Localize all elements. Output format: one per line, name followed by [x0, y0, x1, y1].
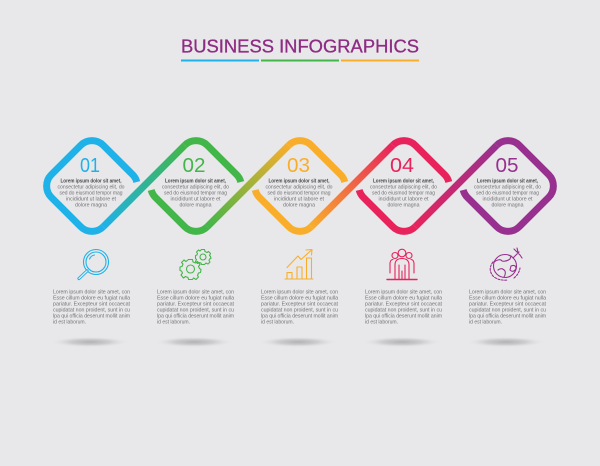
step 01 text: 01 [80, 155, 100, 177]
paragraph column 3: pariatur. Excepteur sint occaecat [261, 302, 339, 308]
icon: globe with plane [490, 248, 522, 280]
paragraph column 5: pariatur. Excepteur sint occaecat [469, 302, 547, 308]
paragraph column 2: pariatur. Excepteur sint occaecat [157, 302, 235, 308]
step 03 text: Lorem ipsum dolor sit amet, [268, 178, 330, 184]
step 03 text [266, 155, 333, 208]
step 02 text [162, 155, 229, 208]
step 02 text: 02 [182, 155, 206, 177]
paragraph column 5 [469, 290, 547, 326]
title: BUSINESS INFOGRAPHICS [181, 36, 419, 56]
step 01 text: Lorem ipsum dolor sit amet, [60, 178, 122, 184]
icon: growth chart [285, 250, 313, 279]
paragraph column 1: lpa qui officia deserunt mollit anim [53, 314, 130, 320]
step 04 text [370, 155, 437, 208]
icon: magnifying glass [79, 250, 108, 278]
ribbon: blue to green strand [47, 141, 241, 231]
ribbon: red to purple strand [359, 141, 553, 231]
step 01 text: dolore magna [75, 202, 107, 208]
step 01 text [58, 155, 125, 208]
paragraph column 5: Lorem ipsum dolor site amet, con [469, 290, 546, 296]
step 05 text: consectetur adipiscing elit, do [474, 184, 541, 190]
step 05 text: incididunt ut labore et [482, 196, 533, 202]
paragraph column 4: lpa qui officia deserunt mollit anim [365, 314, 442, 320]
paragraph column 1 [53, 290, 131, 326]
step 02 text: sed do eiusmod tempor mag [164, 190, 227, 196]
ribbon: green to orange strand [151, 141, 345, 231]
step 03 text: consectetur adipiscing elit, do [266, 184, 333, 190]
step 05 text [474, 155, 541, 208]
step 03 text: sed do eiusmod tempor mag [268, 190, 331, 196]
paragraph column 2 [157, 290, 235, 326]
paragraph column 2: id est laborum. [157, 320, 190, 326]
paragraph column 5: Esse cillum dolore eu fugiat nulla [469, 296, 546, 302]
paragraph column 1: cupidatat non proident, sunt in cu [53, 308, 130, 314]
drop shadows under columns [50, 336, 546, 348]
paragraph column 5: cupidatat non proident, sunt in cu [469, 308, 546, 314]
step 02 text: consectetur adipiscing elit, do [162, 184, 229, 190]
step 04 text: Lorem ipsum dolor sit amet, [373, 178, 435, 184]
paragraph column 4: Lorem ipsum dolor site amet, con [365, 290, 442, 296]
paragraph column 4: id est laborum. [365, 320, 398, 326]
paragraph column 3: Lorem ipsum dolor site amet, con [261, 290, 338, 296]
step 01 text: sed do eiusmod tempor mag [60, 190, 123, 196]
paragraph column 4: cupidatat non proident, sunt in cu [365, 308, 442, 314]
paragraph column 3: id est laborum. [261, 320, 294, 326]
paragraph column 3: Esse cillum dolore eu fugiat nulla [261, 296, 338, 302]
step 02 text: incididunt ut labore et [170, 196, 221, 202]
step 04 text: sed do eiusmod tempor mag [372, 190, 435, 196]
paragraph column 4: pariatur. Excepteur sint occaecat [365, 302, 443, 308]
step 01 text: consectetur adipiscing elit, do [58, 184, 125, 190]
paragraph column 3: lpa qui officia deserunt mollit anim [261, 314, 338, 320]
step 05 text: sed do eiusmod tempor mag [476, 190, 539, 196]
step 04 text: consectetur adipiscing elit, do [370, 184, 437, 190]
step 04 text: incididunt ut labore et [378, 196, 429, 202]
step 05 text: dolore magna [492, 202, 524, 208]
paragraph column 2: lpa qui officia deserunt mollit anim [157, 314, 234, 320]
ribbon: orange to red strand [255, 141, 449, 231]
step 01 text: incididunt ut labore et [66, 196, 117, 202]
step 05 text: 05 [496, 155, 518, 177]
title underline [181, 60, 419, 62]
step 04 text: dolore magna [388, 202, 420, 208]
paragraph column 1: Esse cillum dolore eu fugiat nulla [53, 296, 130, 302]
paragraph column 1: pariatur. Excepteur sint occaecat [53, 302, 131, 308]
paragraph column 2: Lorem ipsum dolor site amet, con [157, 290, 234, 296]
icon: group of people [387, 249, 417, 280]
step 03 text: incididunt ut labore et [274, 196, 325, 202]
step 02 text: dolore magna [180, 202, 212, 208]
paragraph column 3: cupidatat non proident, sunt in cu [261, 308, 338, 314]
step 04 text: 04 [390, 155, 414, 177]
icon: gears [180, 250, 211, 280]
step 03 text: 03 [287, 155, 310, 177]
step 02 text: Lorem ipsum dolor sit amet, [165, 178, 227, 184]
paragraph column 5: lpa qui officia deserunt mollit anim [469, 314, 546, 320]
paragraph column 1: Lorem ipsum dolor site amet, con [53, 290, 130, 296]
step 03 text: dolore magna [283, 202, 315, 208]
paragraph column 4: Esse cillum dolore eu fugiat nulla [365, 296, 442, 302]
step 05 text: Lorem ipsum dolor sit amet, [477, 178, 539, 184]
paragraph column 2: cupidatat non proident, sunt in cu [157, 308, 234, 314]
paragraph column 3 [261, 290, 339, 326]
paragraph column 4 [365, 290, 443, 326]
paragraph column 2: Esse cillum dolore eu fugiat nulla [157, 296, 234, 302]
paragraph column 5: id est laborum. [469, 320, 502, 326]
paragraph column 1: id est laborum. [53, 320, 86, 326]
